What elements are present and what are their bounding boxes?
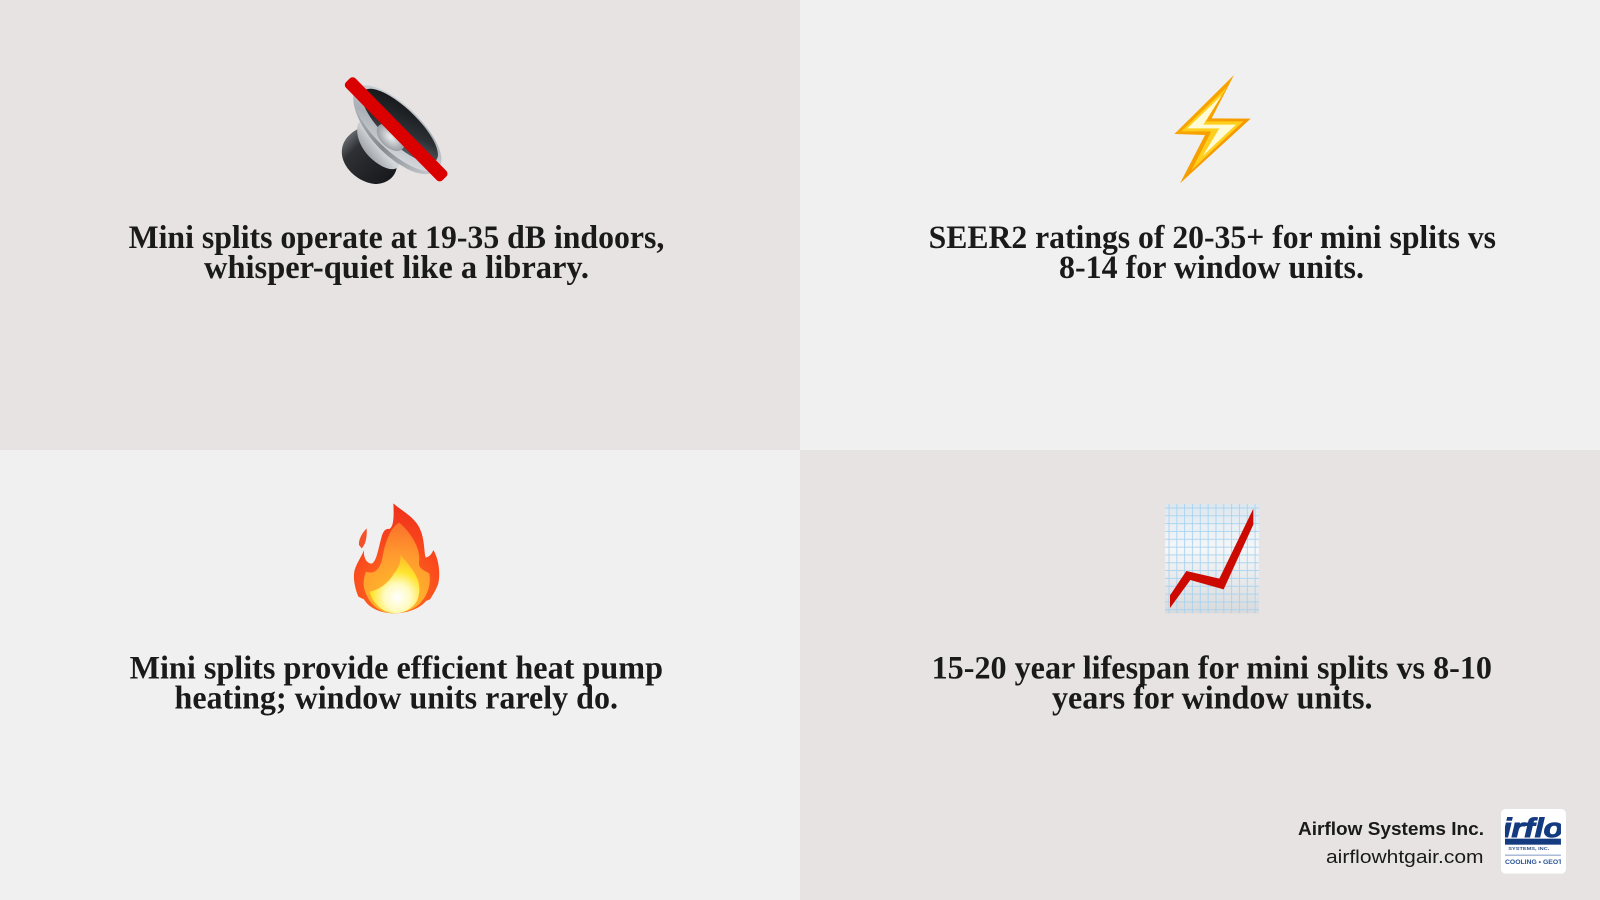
logo: irflo [1503, 813, 1563, 843]
icon: rising chart [1165, 504, 1259, 613]
heading: heating [130, 650, 663, 716]
panel: quiet operation [0, 0, 800, 450]
heading: quiet: whisper-quiet like a library. [204, 250, 589, 286]
icon: lightning bolt [1174, 75, 1251, 183]
heading: quiet: Mini splits operate at 19-35 dB indoors, [129, 220, 664, 256]
brand url: airflowhtgair.com [1326, 846, 1484, 867]
brand name: Airflow Systems Inc. [1298, 818, 1484, 839]
heading: efficiency: 8-14 for window units. [1059, 250, 1364, 286]
heading: lifespan: years for window units. [1052, 680, 1372, 716]
panel: heating [0, 450, 800, 900]
icon: fire [354, 503, 439, 613]
logo: COOLING • GEOT [1505, 860, 1563, 866]
heading: quiet [129, 220, 664, 286]
logo: SYSTEMS, INC. [1508, 846, 1549, 851]
heading: heating: Mini splits provide efficient heat pump [130, 650, 663, 686]
panel: lifespan [800, 450, 1600, 900]
panel: efficiency [800, 0, 1600, 450]
heading: lifespan [932, 650, 1492, 716]
icon: muted speaker [340, 72, 454, 184]
heading: lifespan: 15-20 year lifespan for mini splits vs 8-10 [932, 650, 1492, 686]
heading: efficiency: SEER2 ratings of 20-35+ for mini splits vs [929, 220, 1496, 256]
heading: heating: heating; window units rarely do. [174, 680, 618, 716]
logo [1501, 809, 1566, 874]
heading: efficiency [929, 220, 1496, 286]
